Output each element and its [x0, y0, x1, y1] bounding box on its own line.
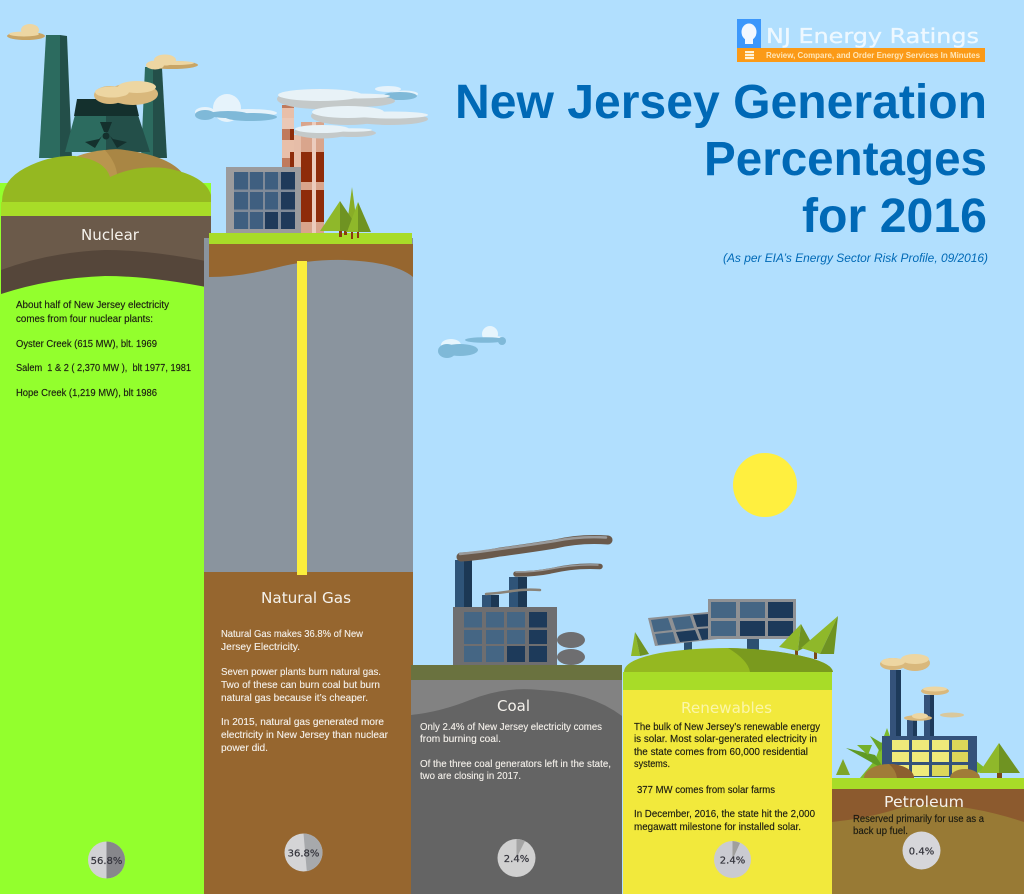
gas column background: [204, 238, 413, 572]
panel: coal: [411, 537, 622, 894]
heading: Coal: Coal: [497, 697, 530, 715]
text block: renewables description: The bulk of New Jersey’s renewable energy: [634, 721, 821, 733]
heading: Natural Gas: Natural Gas: [261, 589, 351, 607]
title: for 2016: [802, 190, 987, 243]
heading: Renewables: Renewables: [681, 699, 772, 717]
coal column background: [411, 680, 622, 894]
heading: Petroleum: Petroleum: [884, 793, 964, 811]
text block: petroleum description: back up fuel.: [853, 825, 908, 837]
text block: natural gas description: In 2015, natural gas generated more: [221, 716, 384, 728]
hill: [624, 648, 833, 672]
text block: natural gas description: [221, 628, 388, 754]
olive ground strip: [411, 665, 622, 680]
icon: gas plant with chimneys: [226, 105, 324, 233]
logo: NJ Energy Ratings: Review, Compare, and Order Energy Services In Minutes: [766, 51, 981, 60]
text block: natural gas description: Seven power plants burn natural gas.: [221, 666, 381, 678]
text block: coal description: two are closing in 2017.: [420, 770, 521, 782]
text block: natural gas description: electricity in New Jersey than nuclear: [221, 729, 388, 741]
text block: nuclear description: About half of New Jersey electricity: [16, 299, 170, 311]
text block: coal description: [420, 721, 611, 782]
subtitle: source note: (As per EIA’s Energy Sector Risk Profile, 09/2016): [723, 253, 988, 265]
pie chart: 2.4% coal: [498, 839, 536, 877]
title: Percentages: [704, 133, 987, 186]
text block: nuclear description: [16, 299, 191, 399]
icon: petroleum refinery: [882, 670, 977, 777]
pie chart: 2.4% renewables: [714, 841, 751, 878]
icon: small clouds in sky: [438, 326, 506, 358]
title: New Jersey Generation: [455, 76, 987, 129]
text block: renewables description: 377 MW comes from solar farms: [637, 784, 775, 796]
yellow gas pipeline: [297, 261, 307, 575]
text block: natural gas description: Jersey Electricity.: [221, 641, 300, 653]
dirt mounds: [864, 764, 980, 778]
text block: renewables description: [634, 721, 821, 833]
text block: renewables description: In December, 2016, the state hit the 2,000: [634, 808, 815, 820]
text block: coal description: Of the three coal generators left in the state,: [420, 758, 611, 770]
text block: nuclear description: Salem 1 & 2 ( 2,370 MW ), blt 1977, 1981: [16, 362, 191, 374]
text block: renewables description: the state comes from 60,000 residential: [634, 746, 808, 758]
nuclear column background: [0, 183, 211, 894]
icon: nuclear plant: [2, 35, 211, 203]
title: [455, 76, 987, 243]
pie chart: 56.8%: [88, 842, 125, 878]
brown soil layers: [1, 216, 211, 294]
text block: coal description: from burning coal.: [420, 733, 501, 745]
icon: coal factory: [453, 560, 557, 665]
renewables column background: [623, 690, 832, 894]
pie chart: 2.4% coal: 2.4%: [504, 854, 529, 865]
text block: renewables description: megawatt milestone for installed solar.: [634, 821, 801, 833]
heading: Nuclear: Nuclear: [81, 226, 140, 244]
text block: nuclear description: comes from four nuclear plants:: [16, 313, 153, 325]
text block: renewables description: systems.: [634, 758, 670, 770]
text block: natural gas description: natural gas because it’s cheaper.: [221, 692, 368, 704]
lime grass band: [623, 672, 832, 690]
text block: coal description: Only 2.4% of New Jersey electricity comes: [420, 721, 602, 733]
petroleum column background: [832, 789, 1024, 894]
panel: nuclear: [0, 24, 211, 894]
text block: renewables description: is solar. Most solar-generated electricity in: [634, 733, 817, 745]
text block: natural gas description: Natural Gas makes 36.8% of New: [221, 628, 363, 640]
clouds over refinery: [880, 654, 964, 721]
text block: natural gas description: power did.: [221, 742, 268, 754]
lime grass band: [832, 778, 1024, 789]
icon: sun: [733, 453, 797, 517]
text block: petroleum description: [853, 813, 984, 837]
text block: petroleum description: Reserved primarily for use as a: [853, 813, 984, 825]
pie chart: 0.4%: [902, 832, 940, 870]
pie chart: 36.8%: [284, 834, 322, 872]
pie chart: 2.4% renewables: 2.4%: [720, 856, 745, 866]
icon: pine trees: [320, 187, 371, 239]
smoke from coal chimneys: [460, 537, 608, 594]
clouds over nuclear plant: [7, 24, 198, 105]
pie chart: 36.8%: 36.8%: [288, 848, 319, 860]
text block: nuclear description: Oyster Creek (615 MW), blt. 1969: [16, 338, 157, 350]
icon: trees on hill: [631, 616, 838, 659]
lime grass band: [1, 202, 211, 216]
logo: NJ Energy Ratings: NJ Energy Ratings: [766, 24, 979, 48]
clouds over gas plant: [195, 86, 428, 138]
panel: natural gas: [195, 86, 428, 894]
text block: natural gas description: Two of these can burn coal but burn: [221, 679, 380, 691]
lime grass band: [209, 233, 412, 244]
coal lumps: [557, 632, 585, 665]
brown soil cap: [209, 244, 413, 277]
logo: NJ Energy Ratings: [737, 19, 985, 62]
pie chart: 56.8%: 56.8%: [91, 856, 122, 867]
text block: nuclear description: Hope Creek (1,219 MW), blt 1986: [16, 387, 157, 399]
icon: leaves and small trees: [836, 728, 1020, 778]
panel: petroleum: [832, 654, 1024, 894]
panel: renewables: [623, 599, 838, 894]
pie chart: 0.4%: 0.4%: [909, 846, 934, 858]
icon: solar panels: [648, 599, 796, 650]
